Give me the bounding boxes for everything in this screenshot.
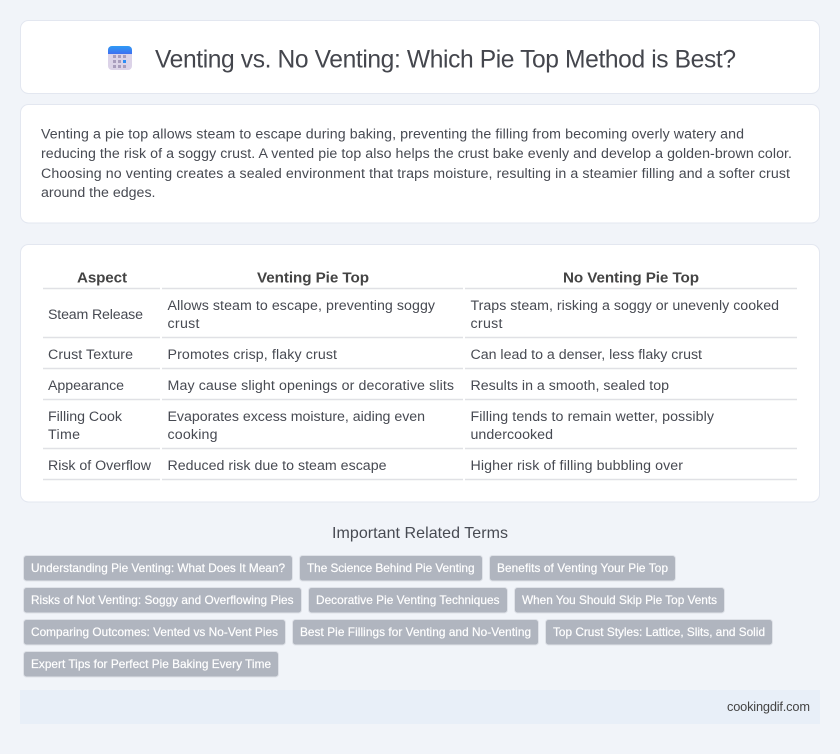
- title: Venting vs. No Venting: Which Pie Top Method is Best?: [155, 46, 736, 74]
- table header row: No Venting Pie Top: [563, 270, 699, 286]
- table row: crust texture: Can lead to a denser, less flaky crust: [470, 347, 702, 363]
- panel: comparison table: [20, 244, 820, 502]
- table row: appearance: May cause slight openings or decorative slits: [168, 378, 454, 394]
- tag: [24, 652, 278, 677]
- table row: crust texture: Promotes crisp, flaky crust: [168, 347, 337, 363]
- table header row: [77, 270, 699, 286]
- table row: risk of overflow: Higher risk of filling bubbling over: [470, 458, 683, 474]
- text block: introduction paragraph: around the edges.: [41, 185, 156, 201]
- panel: introduction: [20, 104, 820, 223]
- table row: steam release: [48, 298, 779, 332]
- table row: filling cook time: Filling tends to remain wetter, possibly: [470, 409, 715, 425]
- tag: Benefits of Venting Your Pie Top: [497, 561, 668, 575]
- table row: filling cook time: Filling Cook: [48, 409, 123, 425]
- tag: Expert Tips for Perfect Pie Baking Every Time: [31, 657, 271, 671]
- tag: Understanding Pie Venting: What Does It Mean?: [31, 561, 285, 575]
- table row: steam release: Steam Release: [48, 307, 143, 323]
- table row: filling cook time: undercooked: [470, 427, 553, 443]
- tag: Top Crust Styles: Lattice, Slits, and Solid: [553, 625, 765, 639]
- tag: [292, 620, 538, 645]
- table row: appearance: Results in a smooth, sealed top: [470, 378, 669, 394]
- tag: Risks of Not Venting: Soggy and Overflowing Pies: [31, 593, 294, 607]
- tag: Decorative Pie Venting Techniques: [316, 593, 500, 607]
- footer source: cookingdif.com: [727, 699, 810, 714]
- text block: introduction paragraph: Choosing no venting creates a sealed environment that traps moisture, resulting in a steamier filling and a softer crust: [41, 166, 790, 182]
- tag: [300, 556, 482, 581]
- table row: filling cook time: Time: [48, 427, 80, 443]
- text block: introduction paragraph: Venting a pie top allows steam to escape during baking, preventing the filling from becoming overly watery and: [41, 126, 744, 142]
- table row: filling cook time: [48, 409, 715, 443]
- table row: filling cook time: Evaporates excess moisture, aiding even: [168, 409, 425, 425]
- table row: appearance: [48, 378, 669, 394]
- table row: steam release: Allows steam to escape, preventing soggy: [168, 298, 436, 314]
- tag: [308, 588, 508, 613]
- panel: title header: [20, 20, 820, 94]
- tag: Best Pie Fillings for Venting and No-Venting: [300, 625, 531, 639]
- table header row: Venting Pie Top: [257, 270, 369, 286]
- table row: crust texture: [48, 347, 702, 363]
- tag: Comparing Outcomes: Vented vs No-Vent Pies: [31, 625, 278, 639]
- table row: steam release: Traps steam, risking a soggy or unevenly cooked: [470, 298, 779, 314]
- table row: steam release: crust: [470, 316, 503, 332]
- tag: [514, 588, 724, 613]
- tag: [24, 588, 302, 613]
- table row: crust texture: Crust Texture: [48, 347, 133, 363]
- tag: [546, 620, 772, 645]
- panel: related term tags: [24, 556, 772, 677]
- table row: risk of overflow: Risk of Overflow: [48, 458, 152, 474]
- text block: introduction paragraph: [41, 126, 792, 201]
- table row: appearance: Appearance: [48, 378, 124, 394]
- tag: When You Should Skip Pie Top Vents: [522, 593, 717, 607]
- table row: steam release: crust: [168, 316, 200, 332]
- tag: The Science Behind Pie Venting: [307, 561, 474, 575]
- heading: important related terms: Important Related Terms: [332, 525, 508, 542]
- tag: [24, 556, 292, 581]
- table header row: Aspect: [77, 270, 127, 286]
- tag: [24, 620, 286, 645]
- footer bar: [20, 690, 820, 724]
- table row: risk of overflow: [48, 458, 683, 474]
- tag: [490, 556, 676, 581]
- icon: calendar: [108, 46, 132, 70]
- table row: filling cook time: cooking: [168, 427, 218, 443]
- table row: risk of overflow: Reduced risk due to steam escape: [168, 458, 387, 474]
- text block: introduction paragraph: reducing the risk of a soggy crust. A vented pie top also helps the crust bake evenly and develop a golden-brown color.: [41, 146, 792, 162]
